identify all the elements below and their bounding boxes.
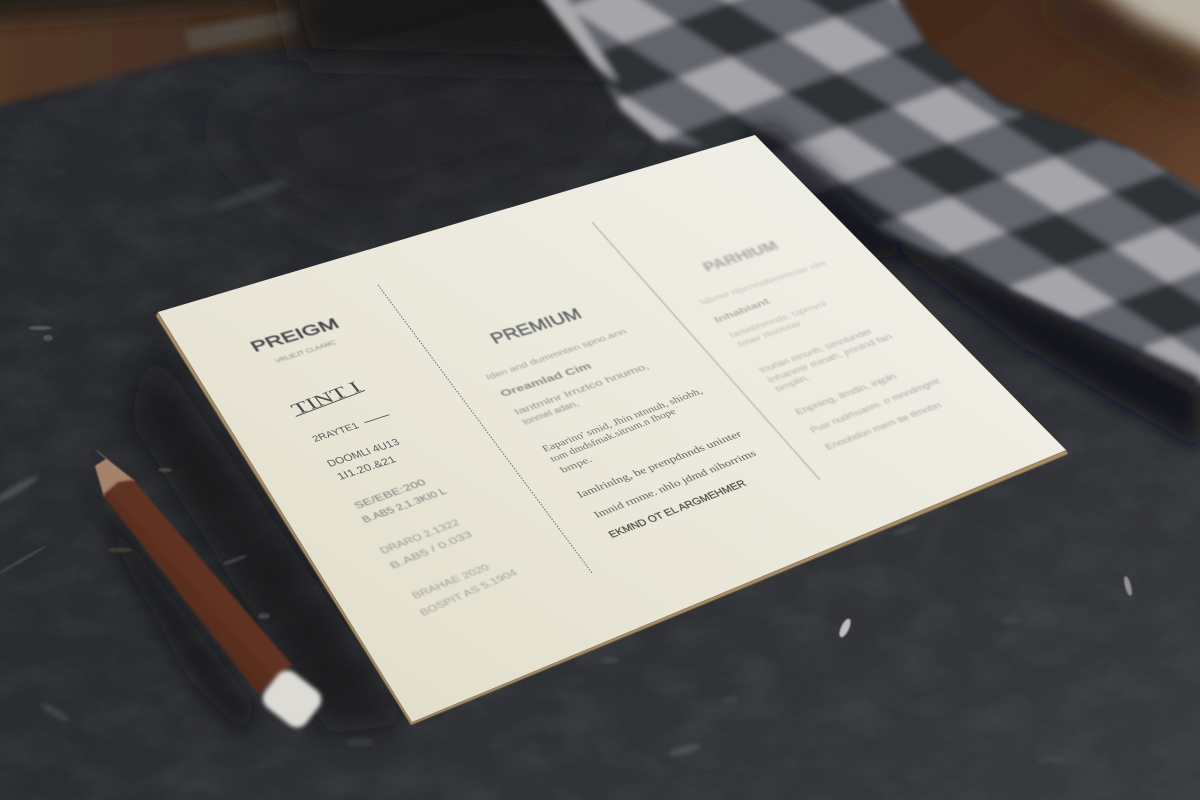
card divider right xyxy=(592,222,820,480)
middle body lines: Iden and dummnten spno.ann xyxy=(484,327,629,382)
left column text: BOSPIT AS 5.1904 xyxy=(418,568,521,618)
middle column text: Eaparino' smid, Jhin ntnnuh, shiobh, xyxy=(540,386,705,454)
right column text: Imer rlormiar xyxy=(736,319,804,349)
left column text: BRAHAE 2020 xyxy=(410,562,492,601)
wood floor, top left xyxy=(0,0,630,112)
right column text: Inhanmir minah, jmnlnd fan xyxy=(765,332,895,385)
pencil eraser xyxy=(258,666,326,732)
card shadow on cloth xyxy=(740,125,910,260)
pencil shadow xyxy=(85,490,255,735)
left section title xyxy=(285,377,367,419)
card dotted divider left xyxy=(378,285,592,573)
pencil graphite point xyxy=(90,450,106,467)
left column text: DRARO 2.1322 xyxy=(378,518,463,556)
middle column text: Oreamlad Cim xyxy=(498,361,594,399)
middle column text: bmpe. xyxy=(558,455,595,475)
left column text: 1I1.20.&21 xyxy=(335,455,399,482)
pencil body xyxy=(103,480,292,694)
checked cloth xyxy=(540,0,1200,396)
pencil xyxy=(90,450,326,732)
left column text: B.AB5 / 0.033 xyxy=(388,529,476,571)
right column text: Enoobdon mem ite tlmnbn xyxy=(823,400,943,452)
left column text xyxy=(247,316,521,618)
left subheading: VRLIEJT CLAAMC xyxy=(274,339,339,365)
left heading: PREIGM xyxy=(247,316,343,355)
middle column text: Iantmlnr Irnzlco hnumo, xyxy=(512,361,651,417)
left date line xyxy=(310,411,392,444)
middle column text xyxy=(484,305,759,540)
middle column text: Imnid rmme. nhlo jdmd nihorrims xyxy=(592,449,759,520)
middle column text: tom dmdsfmak.sitrum.n Ihope xyxy=(548,407,679,464)
right column text: Iamnbhmnds. Uprnvnl xyxy=(728,299,829,340)
wood floor, top right xyxy=(880,0,1200,210)
middle column text: Iamlrinlng, be prenpdnnds uninter xyxy=(575,429,745,500)
right column text: Inurian mnunh, simnlunder xyxy=(757,327,874,375)
left column text: SE/EBE:200 xyxy=(352,478,429,511)
pencil wood tip xyxy=(92,451,135,497)
card xyxy=(158,135,1066,722)
table shading xyxy=(130,30,1200,735)
right body lines: Iabmer nlpnnmdtemmrnlar nlm xyxy=(698,259,828,307)
right column text xyxy=(698,239,943,452)
middle column text: EKMND OT EL ARGMEHMER xyxy=(607,479,749,540)
right heading: PARHIUM xyxy=(700,239,782,275)
middle heading: PREMIUM xyxy=(487,305,585,347)
card thickness edge xyxy=(156,312,1068,725)
left column text: B.AB5 2,1.3KI0 L xyxy=(360,486,450,525)
left section title: TINT I xyxy=(287,377,365,418)
right column text: bmplin. xyxy=(773,373,812,394)
left entries: DOOMLI 4U13 xyxy=(325,437,402,469)
right column text: Inhabiant xyxy=(712,297,772,325)
middle column text: Ionmel adan, xyxy=(520,399,581,427)
right column text: Pusr nudrhuanm. rr mnndmgmt xyxy=(808,376,942,435)
left date line: 2RAYTE1 xyxy=(310,421,361,444)
right column text: Enpning, ilmdln. injpln xyxy=(793,371,899,417)
table scuffs and dust xyxy=(0,176,1133,763)
